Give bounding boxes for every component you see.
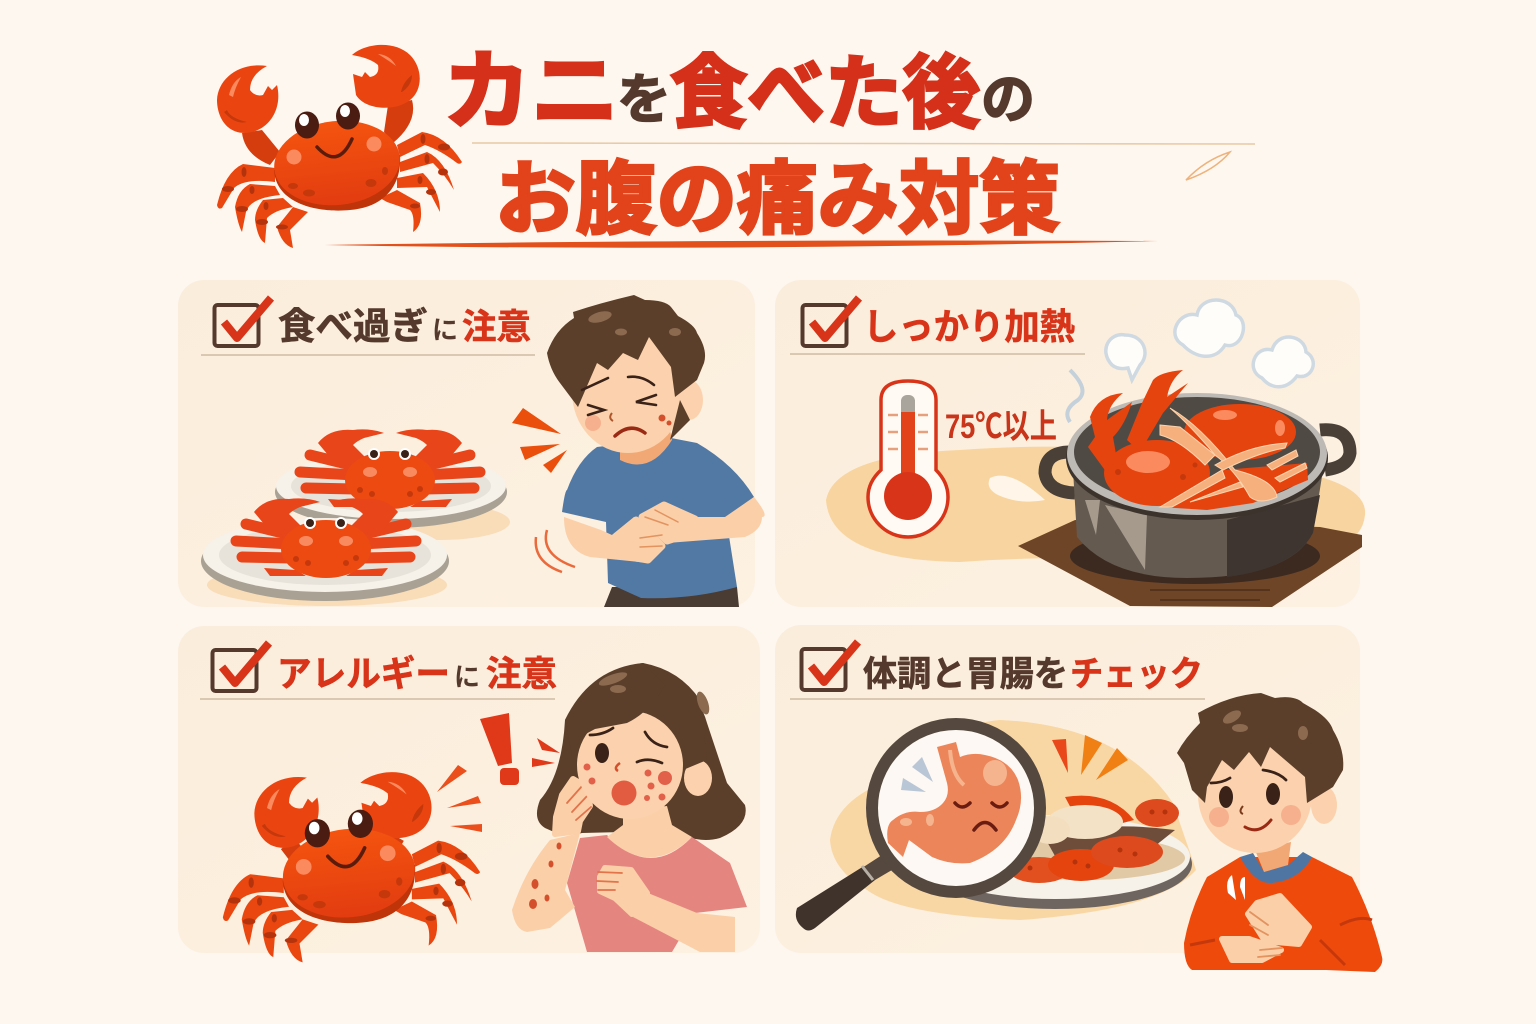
heading: チェック: [1070, 655, 1203, 694]
title particle の: の: [981, 70, 1035, 130]
icon: crab: [223, 772, 480, 962]
orange blob: [826, 447, 1365, 562]
icon: checkbox: [802, 298, 859, 346]
illustration: girl with rash: [512, 663, 747, 952]
orange blob: [830, 720, 1196, 920]
illustration: boy checking stomach: [1177, 693, 1382, 972]
icon: checkbox: [214, 298, 271, 346]
panel: しっかり加熱: [775, 280, 1365, 607]
panel background: [178, 626, 760, 953]
title line 1 main: 食べた後: [670, 49, 980, 138]
title block: [217, 44, 1255, 248]
panel: 食べ過ぎに注意: [178, 280, 765, 607]
icon: title crab: [217, 45, 462, 248]
panel background: [775, 625, 1360, 953]
illustration: plate of crab: [918, 796, 1192, 909]
steam swoosh: [989, 476, 1045, 502]
title particle を: を: [617, 70, 671, 130]
heading: [278, 306, 531, 347]
icon: stomach: [887, 742, 1021, 863]
icon: thermometer: [868, 381, 948, 537]
heading: に: [432, 315, 458, 345]
icon: magnifying glass: [796, 724, 1040, 930]
heading: に: [454, 662, 480, 692]
icon: checkbox: [212, 643, 269, 691]
panel background: [775, 280, 1360, 607]
title underline swoosh: [325, 240, 1158, 248]
illustration: two plates of crab: [201, 429, 510, 606]
illustration: pot on wooden board: [1018, 370, 1362, 607]
icon: checkbox: [802, 642, 858, 690]
illustration: pain marks: [512, 408, 575, 572]
heading: [863, 655, 1203, 694]
heading: しっかり加熱: [863, 306, 1075, 347]
illustration: boy holding stomach: [547, 295, 765, 607]
steam wisp: [1067, 370, 1082, 422]
icon: alert marks: [437, 765, 482, 832]
panel background: [178, 280, 755, 607]
heading: 注意: [486, 655, 557, 694]
heading: [277, 653, 557, 694]
heading: 食べ過ぎ: [278, 306, 428, 347]
panel: 体調と胃腸をチェック: [775, 625, 1382, 972]
heading: アレルギー: [277, 653, 450, 694]
title line 1: カニ: [443, 44, 619, 140]
title line 2: お腹の痛み対策: [495, 155, 1060, 244]
panel: アレルギーに注意: [178, 626, 760, 962]
heading: 体調と胃腸を: [863, 655, 1068, 694]
temperature label: 75℃以上: [945, 408, 1057, 446]
icon: alert rays: [1052, 735, 1128, 780]
icon: exclamation mark: [480, 713, 560, 785]
title flourish: [1186, 152, 1230, 180]
icon: steam clouds: [1106, 300, 1313, 387]
title divider line: [472, 143, 1255, 144]
heading: 注意: [462, 308, 531, 347]
